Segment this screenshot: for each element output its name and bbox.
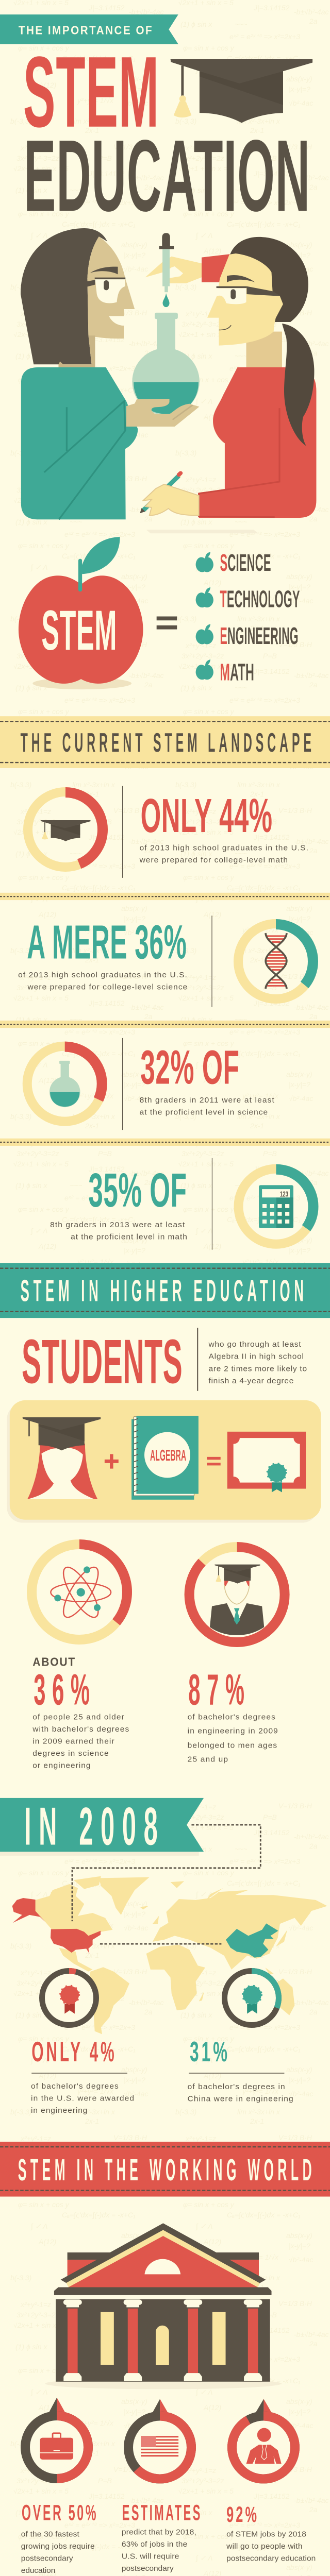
description: 8th graders in 2011 were at least xyxy=(140,1096,275,1105)
divider xyxy=(0,1021,330,1028)
label: about: ABOUT xyxy=(32,1655,76,1669)
stat: about 36% xyxy=(32,1545,129,1770)
icon: US flag xyxy=(141,2436,178,2456)
apple icon: STEM xyxy=(41,599,117,662)
description: 63% of jobs in the xyxy=(122,2540,187,2549)
stat: a mere 36% science xyxy=(18,916,314,1007)
map: USA xyxy=(12,1898,101,1954)
description xyxy=(188,1713,278,1764)
description: are 2 times more likely to xyxy=(208,1365,307,1373)
pointer xyxy=(256,2399,272,2420)
icon: flask xyxy=(50,1061,80,1107)
description: belonged to men ages xyxy=(188,1741,277,1750)
big number: ONLY 4% xyxy=(31,2036,117,2067)
description: of the 30 fastest xyxy=(21,2530,80,2538)
donut chart 4% xyxy=(42,1971,96,2025)
description: in engineering xyxy=(31,2106,87,2115)
flask xyxy=(132,313,200,415)
table shadow xyxy=(146,530,258,533)
title block: STEM xyxy=(23,36,159,148)
list: science xyxy=(196,550,271,577)
equals sign xyxy=(157,616,177,630)
description: postsecondary xyxy=(122,2564,174,2573)
list: engineering xyxy=(196,623,299,650)
description xyxy=(140,1096,275,1116)
big number: 31% xyxy=(190,2036,230,2067)
description: in 2009 earned their xyxy=(32,1737,114,1745)
pointer xyxy=(153,2399,168,2420)
left scientist neck xyxy=(58,335,95,368)
donut chart 50% xyxy=(25,2416,88,2479)
description xyxy=(122,2528,196,2576)
description: of bachelor's degrees in xyxy=(188,2082,285,2091)
pointer xyxy=(48,2398,65,2420)
ribbon: in 2008 xyxy=(0,1796,204,1856)
description xyxy=(50,1221,187,1242)
divider xyxy=(0,893,330,900)
icon: diploma xyxy=(227,1432,306,1493)
icon: atom xyxy=(51,1563,111,1621)
description xyxy=(31,2082,134,2115)
stat: only 4% U.S. xyxy=(31,1971,134,2115)
icon: algebra notebook: ALGEBRA xyxy=(150,1447,186,1464)
description: will go to people with xyxy=(226,2542,303,2551)
icon: graduate man xyxy=(210,1565,264,1635)
heading: OVER 50% xyxy=(22,2500,98,2525)
title ribbon: THE IMPORTANCE OF xyxy=(19,24,153,38)
right scientist head xyxy=(207,237,308,346)
description: were prepared for college-level math xyxy=(139,856,288,865)
description: in engineering in 2009 xyxy=(188,1727,278,1735)
icon: briefcase xyxy=(40,2433,73,2460)
stat: estimates xyxy=(122,2399,202,2576)
icon: DNA xyxy=(266,933,287,989)
description: or engineering xyxy=(32,1761,91,1770)
stat: 32% science xyxy=(27,1038,275,1130)
description: in the U.S. were awarded xyxy=(31,2094,134,2103)
icon: teal seal xyxy=(243,1986,261,2014)
description: U.S. will require xyxy=(122,2552,179,2561)
donut chart 32% xyxy=(27,1046,103,1122)
stat: 35% math xyxy=(50,1158,314,1250)
stat: 87% xyxy=(188,1547,285,1764)
panel: students algebra xyxy=(7,1327,321,1523)
icon: calculator: 123 xyxy=(280,1190,288,1198)
description: at the proficient level in math xyxy=(71,1233,187,1242)
description: of STEM jobs by 2018 xyxy=(226,2530,306,2538)
description: 8th graders in 2013 were at least xyxy=(50,1221,185,1229)
donut chart 31% xyxy=(225,1971,278,2025)
dropper hand xyxy=(145,254,230,283)
donut chart 87% xyxy=(189,1547,285,1642)
equation card xyxy=(7,1400,321,1523)
title block xyxy=(0,14,312,233)
donut chart 36% xyxy=(238,924,314,999)
description: of 2013 high school graduates in the U.S. xyxy=(18,971,187,979)
description: of bachelor's degrees xyxy=(188,1713,275,1721)
description: postsecondary education xyxy=(226,2554,316,2563)
stat: about 36%: 36% xyxy=(34,1666,96,1714)
dashed connector xyxy=(72,1825,260,1921)
title ribbon xyxy=(0,14,178,44)
description xyxy=(32,1713,129,1770)
STEM equation: SCIENCE xyxy=(220,550,271,577)
stat: 92% xyxy=(226,2399,316,2563)
icon: algebra notebook xyxy=(131,1416,199,1500)
description: predict that by 2018, xyxy=(122,2528,196,2536)
icon: government building xyxy=(45,2223,282,2389)
icon: calculator xyxy=(259,1185,293,1228)
banner: STEM in the working world xyxy=(0,2142,330,2197)
apple icon xyxy=(19,537,143,689)
description: who go through at least xyxy=(208,1340,301,1349)
stat: over 50% xyxy=(21,2398,98,2575)
description: were prepared for college-level science xyxy=(27,983,187,991)
donut chart 36% xyxy=(32,1545,127,1639)
world map section xyxy=(0,1796,327,2034)
description: of bachelor's degrees xyxy=(31,2082,119,2091)
description: of 2013 high school graduates in the U.S. xyxy=(140,844,308,853)
description: 25 and up xyxy=(188,1755,228,1764)
icon: red seal xyxy=(60,1986,79,2014)
world map xyxy=(36,1876,327,2034)
description: education xyxy=(21,2566,55,2575)
donut chart 92% xyxy=(232,2416,295,2479)
donut chart 63% xyxy=(128,2416,191,2479)
description xyxy=(208,1340,307,1385)
icon: cap xyxy=(41,820,90,841)
description xyxy=(226,2530,316,2563)
description: growing jobs require xyxy=(21,2542,95,2551)
equals sign xyxy=(207,1457,221,1465)
description: of people 25 and older xyxy=(32,1713,124,1721)
right scientist body xyxy=(199,324,316,518)
STEM equation xyxy=(19,537,300,689)
banner: STEM in higher education xyxy=(0,1263,330,1318)
description: finish a 4-year degree xyxy=(208,1377,293,1385)
dropper xyxy=(159,233,174,307)
heading: 92% xyxy=(226,2502,259,2527)
description: degrees in science xyxy=(32,1750,109,1758)
left scientist body xyxy=(21,367,200,519)
left scientist head xyxy=(21,228,135,364)
plus sign xyxy=(105,1454,119,1469)
big number: 32% OF xyxy=(140,1041,239,1094)
big number: 35% OF xyxy=(88,1164,187,1217)
divider xyxy=(0,1139,330,1146)
description xyxy=(18,971,187,991)
illustration: two scientists xyxy=(21,228,316,533)
description: Algebra II in high school xyxy=(208,1352,304,1361)
list: math: MATH xyxy=(220,659,254,686)
donut chart 44% xyxy=(28,792,103,867)
icon: business person xyxy=(246,2428,282,2464)
description xyxy=(139,844,308,865)
banner: the current STEM landscape xyxy=(0,716,330,768)
list: math xyxy=(196,659,254,686)
icon: graduation cap xyxy=(171,59,312,123)
stat: 31% China xyxy=(188,1971,293,2103)
stat: only 44% math xyxy=(28,786,308,878)
icon: graduate woman xyxy=(23,1417,101,1499)
description xyxy=(188,2082,293,2103)
map: China xyxy=(226,1923,278,1958)
list: technology xyxy=(196,586,300,613)
right scientist neck and ponytail xyxy=(207,312,282,368)
stat: 87%: 87% xyxy=(188,1666,251,1714)
description: at the proficient level in science xyxy=(140,1108,268,1116)
description xyxy=(21,2530,95,2575)
donut chart 35% xyxy=(238,1169,314,1244)
description: with bachelor's degrees xyxy=(32,1725,129,1734)
description: China were in engineering xyxy=(188,2095,293,2103)
text: ESTIMATES xyxy=(122,2500,202,2525)
pencil in hand xyxy=(140,473,199,515)
description: postsecondary xyxy=(21,2554,73,2563)
